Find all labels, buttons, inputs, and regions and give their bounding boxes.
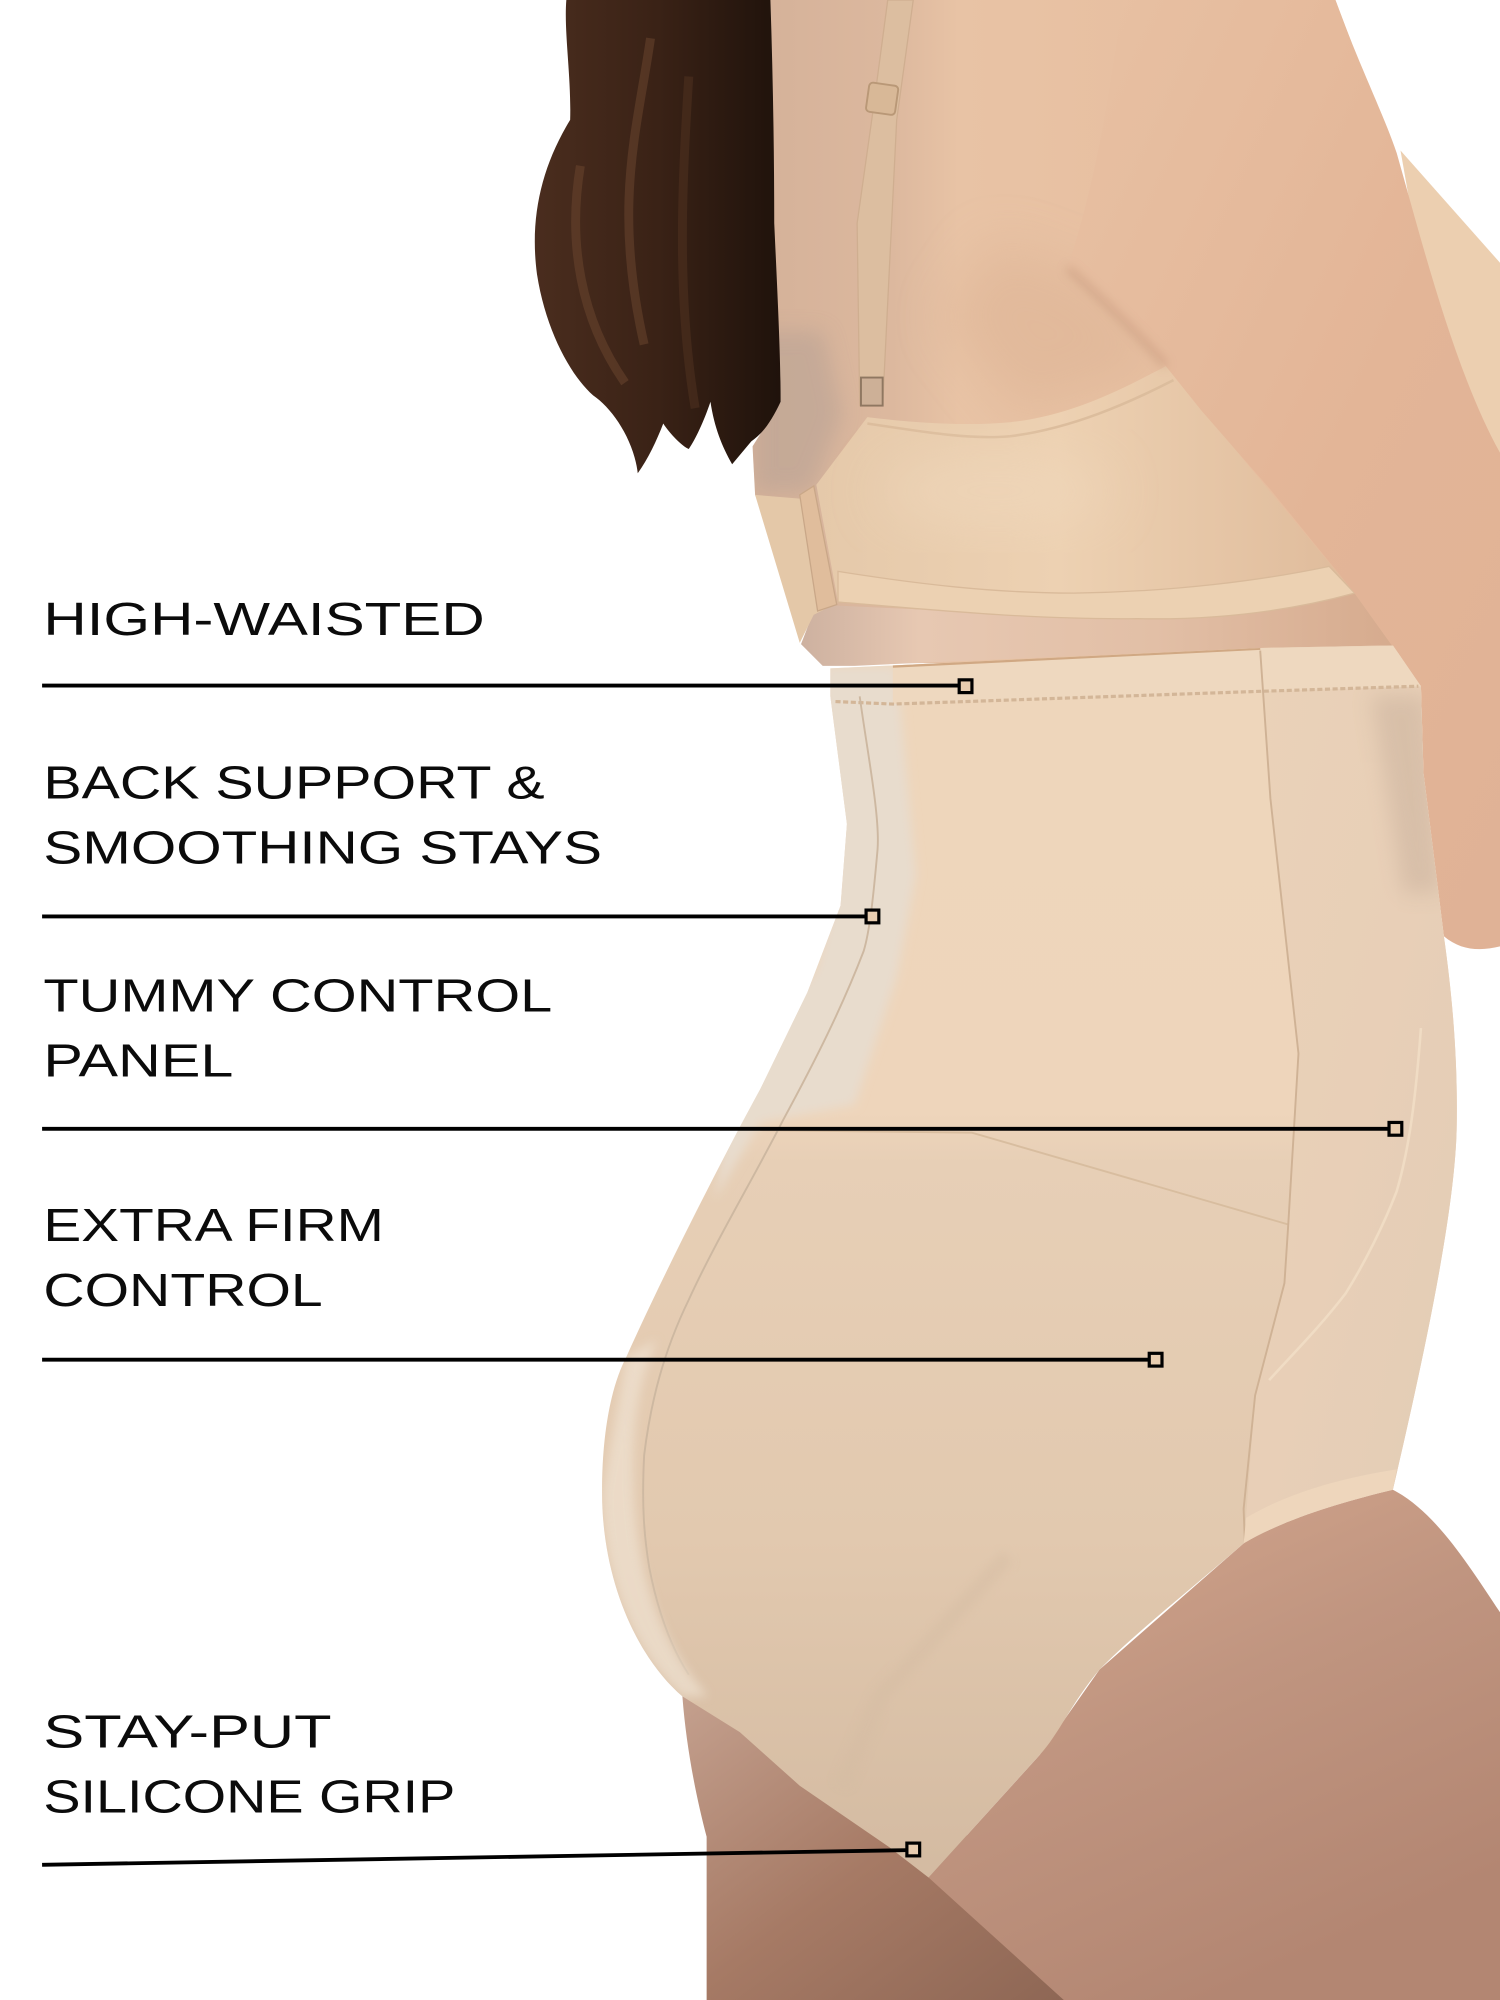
back strip highlight bbox=[714, 666, 916, 1199]
front curve seam bbox=[1269, 1028, 1421, 1380]
armpit crease bbox=[1068, 268, 1166, 366]
hair highlights bbox=[576, 38, 695, 408]
waist stitching bbox=[835, 686, 1418, 704]
callout: high-waisted bbox=[42, 593, 972, 693]
bra hem bbox=[838, 566, 1355, 619]
callout: stay-put silicone grip bbox=[42, 1705, 920, 1865]
bust garment at far right bbox=[1401, 151, 1500, 536]
callout: tummy control panel: PANEL bbox=[43, 1035, 233, 1087]
callout: extra firm control bbox=[42, 1199, 1162, 1366]
hair bbox=[535, 0, 781, 473]
tummy panel edge bbox=[760, 1130, 1288, 1224]
front leg bbox=[929, 1490, 1500, 2000]
top binding bbox=[893, 648, 1260, 666]
callout: tummy control panel bbox=[42, 969, 1402, 1135]
photo: model wearing shaping brief bbox=[535, 0, 1500, 2000]
callout: back support and smoothing stays: SMOOTHING STAYS bbox=[43, 822, 602, 874]
callout: tummy control panel: TUMMY CONTROL bbox=[43, 969, 552, 1021]
knit panel edge bbox=[842, 1556, 1008, 1786]
back skin bbox=[746, 0, 1409, 670]
callout: extra firm control: CONTROL bbox=[43, 1264, 323, 1316]
bra hook closure bbox=[800, 486, 837, 611]
rear leg bbox=[682, 1696, 1097, 2000]
bra band bbox=[816, 366, 1355, 619]
high-waisted brief bbox=[587, 638, 1480, 1888]
bra top edge bbox=[867, 380, 1173, 437]
callout: extra firm control: EXTRA FIRM bbox=[43, 1199, 384, 1251]
bra bbox=[755, 366, 1355, 643]
arm bbox=[1068, 0, 1500, 949]
bra center highlight bbox=[880, 453, 1110, 529]
callout: back support and smoothing stays bbox=[42, 756, 879, 923]
callout: back support and smoothing stays: BACK SUPPORT & bbox=[43, 756, 545, 808]
soft rear edge highlight bbox=[602, 1339, 708, 1696]
leg hem band bbox=[1244, 1469, 1397, 1543]
back seam bbox=[643, 696, 878, 1675]
grey shadow near spine bbox=[755, 332, 842, 491]
bra strap bbox=[857, 0, 913, 406]
side panel bbox=[1346, 646, 1457, 1489]
under-shoulder shading bbox=[987, 287, 1074, 370]
bra rear wing bbox=[755, 495, 829, 643]
callout: stay-put silicone grip: STAY-PUT bbox=[43, 1705, 332, 1757]
shadow beside arm bbox=[1371, 695, 1441, 893]
midriff skin bbox=[801, 593, 1393, 666]
callout: high-waisted: HIGH-WAISTED bbox=[43, 593, 485, 645]
waistband bbox=[893, 645, 1423, 704]
callout: stay-put silicone grip: SILICONE GRIP bbox=[43, 1771, 455, 1823]
side seam bbox=[1244, 651, 1298, 1543]
